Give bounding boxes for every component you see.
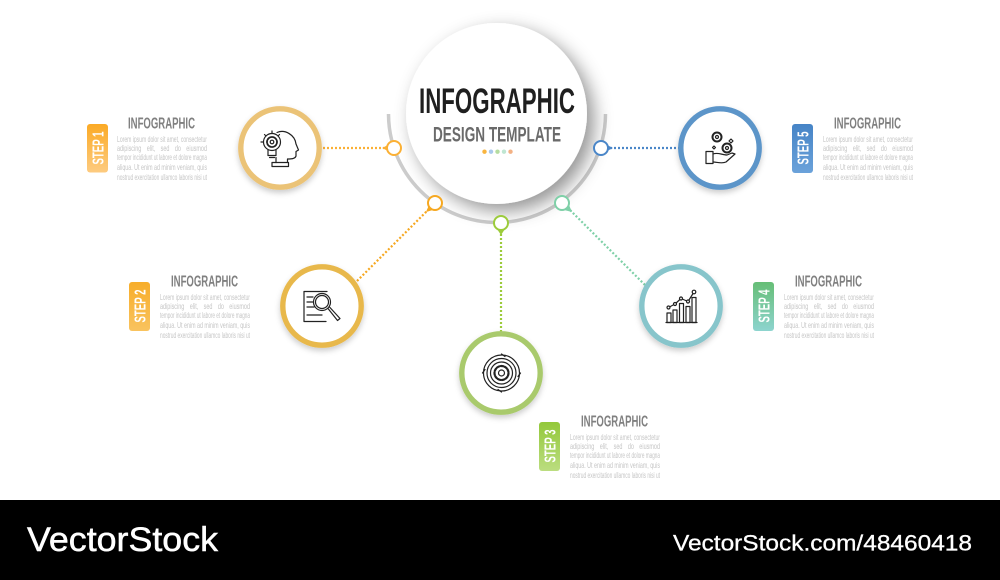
icon: hand with coins	[706, 132, 735, 164]
badge: step 1: STEP 1	[90, 131, 108, 164]
text block: step 5: aliqua. Ut enim ad minim veniam, quis	[823, 162, 913, 172]
ring 3	[462, 334, 540, 412]
text block: step 2: tempor incididunt ut labore et dolore magna	[160, 310, 250, 320]
text block: step 5: Lorem ipsum dolor sit amet, consectetur	[823, 134, 913, 144]
ring 2	[283, 267, 361, 345]
text block: step 4: INFOGRAPHIC	[795, 274, 862, 290]
badge: step 2: STEP 2	[132, 290, 150, 322]
title: INFOGRAPHIC	[419, 82, 575, 121]
step 4 connector	[555, 196, 645, 285]
ring 5	[681, 109, 759, 187]
step 2 connector	[357, 196, 442, 281]
footer bar	[0, 500, 1000, 580]
text block: step 1: INFOGRAPHIC	[128, 116, 195, 132]
text block: step 1: tempor incididunt ut labore et dolore magna	[117, 152, 207, 162]
text block: step 4: aliqua. Ut enim ad minim veniam, quis	[784, 320, 874, 330]
text block: step 4: adipiscing elit, sed do eiusmod	[784, 301, 874, 311]
text block: step 2: INFOGRAPHIC	[171, 274, 238, 290]
panel: step 3	[462, 334, 660, 480]
step 1 connector	[323, 141, 401, 155]
step 5 connector	[594, 141, 679, 155]
icon: bar chart with trend line	[666, 290, 697, 322]
badge: step 1	[87, 124, 108, 172]
panel: step 1	[87, 109, 319, 187]
subtitle: DESIGN TEMPLATE	[433, 124, 561, 146]
text block: step 4: tempor incididunt ut labore et dolore magna	[784, 310, 874, 320]
text block: step 1: aliqua. Ut enim ad minim veniam, quis	[117, 162, 207, 172]
central circle with title	[406, 23, 587, 204]
text block: step 3: Lorem ipsum dolor sit amet, consectetur	[570, 432, 660, 442]
badge: step 4: STEP 4	[756, 289, 774, 322]
text block: step 5	[823, 116, 913, 182]
text block: step 1	[117, 116, 207, 182]
text block: step 2: aliqua. Ut enim ad minim veniam, quis	[160, 320, 250, 330]
text block: step 5: tempor incididunt ut labore et dolore magna	[823, 152, 913, 162]
text block: step 4: nostrud exercitation ullamco laboris nisi ut	[784, 330, 874, 340]
text block: step 2	[160, 274, 250, 340]
text block: step 3: nostrud exercitation ullamco laboris nisi ut	[570, 470, 660, 480]
icon: document with magnifier	[304, 292, 340, 322]
badge: step 3: STEP 3	[542, 429, 560, 462]
icon: head with lightbulb gear	[261, 131, 298, 166]
ring 1	[241, 109, 319, 187]
text block: step 5: nostrud exercitation ullamco laboris nisi ut	[823, 172, 913, 182]
text block: step 4: Lorem ipsum dolor sit amet, consectetur	[784, 292, 874, 302]
badge: step 2	[129, 282, 150, 331]
badge: step 5	[792, 124, 813, 173]
icon: target gear with arrows	[482, 354, 520, 392]
text block: step 3: adipiscing elit, sed do eiusmod	[570, 441, 660, 451]
text block: step 5: INFOGRAPHIC	[834, 116, 901, 132]
text block: step 1: Lorem ipsum dolor sit amet, consectetur	[117, 134, 207, 144]
ring 4	[642, 267, 720, 345]
footer logo: VectorStock	[27, 521, 219, 559]
panel: step 4	[642, 267, 874, 345]
text block: step 4	[784, 274, 874, 340]
panel: step 5	[681, 109, 913, 187]
text block: step 3: tempor incididunt ut labore et dolore magna	[570, 450, 660, 460]
footer url: VectorStock.com/48460418	[673, 530, 972, 556]
text block: step 1: adipiscing elit, sed do eiusmod	[117, 143, 207, 153]
step 3 connector	[494, 216, 508, 332]
text block: step 2: nostrud exercitation ullamco laboris nisi ut	[160, 330, 250, 340]
badge: step 4	[753, 282, 774, 331]
text block: step 3: INFOGRAPHIC	[581, 414, 648, 430]
text block: step 5: adipiscing elit, sed do eiusmod	[823, 143, 913, 153]
badge: step 3	[539, 422, 560, 471]
text block: step 3: aliqua. Ut enim ad minim veniam, quis	[570, 460, 660, 470]
connector arc	[388, 114, 606, 222]
colour dots	[482, 150, 513, 154]
text block: step 1: nostrud exercitation ullamco laboris nisi ut	[117, 172, 207, 182]
panel: step 2	[129, 267, 361, 345]
badge: step 5: STEP 5	[796, 131, 812, 164]
text block: step 3	[570, 414, 660, 480]
text block: step 2: adipiscing elit, sed do eiusmod	[160, 301, 250, 311]
text block: step 2: Lorem ipsum dolor sit amet, consectetur	[160, 292, 250, 302]
